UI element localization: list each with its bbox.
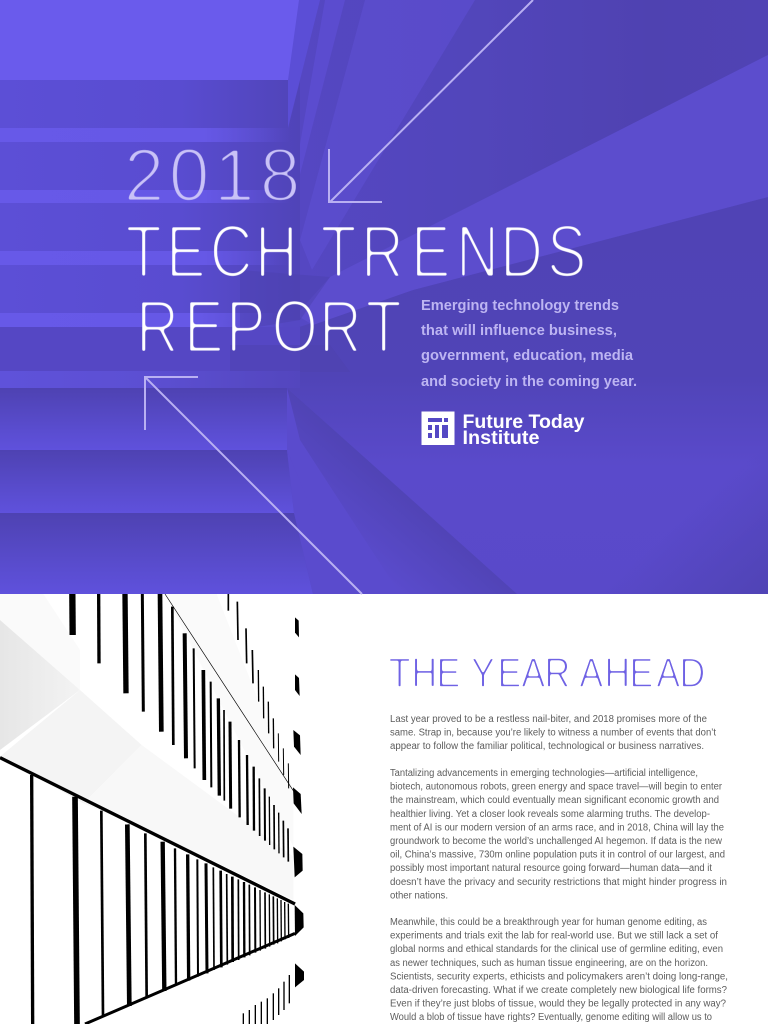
text block: cover subtitle: Emerging technology trends	[421, 297, 619, 314]
paragraph 2: healthier living. Yet a closer look reveals some alarming truths. The develop-	[390, 809, 710, 820]
photo: white building facade	[0, 594, 306, 1024]
paragraph 3: global norms and ethical standards for the clinical use of germline editing, even	[390, 944, 723, 955]
paragraph 3: data-driven forecasting. What if we create completely new biological life forms?	[390, 985, 728, 996]
paragraph 2: doesn’t have the privacy and security restrictions that might hinder progress in	[390, 877, 727, 888]
text block: cover subtitle	[421, 297, 637, 390]
paragraph 2: possibly most important natural resource going forward—human data—and it	[390, 863, 712, 874]
paragraph 3: Would a blob of tissue have rights? Eventually, genome editing will allow us to	[390, 1012, 713, 1023]
arrow: bottom diagonal arrow	[145, 377, 362, 594]
title: 2018 TECH TRENDS REPORT: 2018	[124, 133, 300, 217]
paragraph 3: Even if they’re just blobs of tissue, would they be legally protected in any way?	[390, 999, 727, 1010]
title: 2018 TECH TRENDS REPORT: REPORT	[136, 286, 402, 369]
paragraph 3: as newer techniques, such as human tissue engineering, are on the horizon.	[390, 958, 708, 969]
paragraph 1: same. Strap in, because you’re likely to witness a number of events that don’t	[390, 728, 716, 738]
paragraph 3: experiments and trials exit the lab for real-world use. But we still lack a set of	[390, 931, 718, 942]
paragraph 3	[390, 917, 728, 1023]
paragraph 2: ment of AI is our modern version of an arms race, and in 2018, China will lay the	[390, 822, 725, 833]
paragraph 1	[390, 714, 716, 752]
paragraph 2: groundwork to become the world’s unchallenged AI hegemon. If data is the new	[390, 836, 723, 847]
paragraph 2: the mainstream, which could eventually mean significant economic growth and	[390, 795, 719, 806]
arrow: top diagonal arrow	[329, 0, 533, 202]
title: 2018 TECH TRENDS REPORT: TECH TRENDS	[126, 211, 587, 294]
paragraph 2: biotech, autonomous robots, green energy and space travel—will begin to enter	[390, 782, 723, 793]
paragraph 1: Last year proved to be a restless nail-biter, and 2018 promises more of the	[390, 714, 708, 725]
panel: cover background	[0, 0, 768, 594]
text block: cover subtitle: and society in the coming year.	[421, 373, 637, 390]
logo wordmark	[462, 412, 585, 449]
paragraph 1: appear to follow the familiar political, technological or business narratives.	[390, 741, 704, 752]
paragraph 2	[390, 768, 727, 901]
text block: article body	[390, 714, 728, 1023]
paragraph 2: Tantalizing advancements in emerging technologies—artificial intelligence,	[390, 768, 698, 779]
paragraph 2: oil, China’s massive, 730m online population puts it in control of our largest, and	[390, 850, 725, 861]
paragraph 3: Meanwhile, this could be a breakthrough year for human genome editing, as	[390, 917, 707, 928]
title: 2018 TECH TRENDS REPORT	[124, 133, 587, 369]
logo wordmark: Future Today	[462, 412, 585, 433]
paragraph 2: other nations.	[390, 890, 448, 901]
logo: Future Today Institute	[422, 412, 585, 449]
logo wordmark: Institute	[462, 428, 540, 449]
paragraph 3: Scientists, security experts, ethicists and policymakers aren’t doing long-range,	[390, 971, 728, 982]
text block: cover subtitle: that will influence business,	[421, 322, 617, 339]
heading: THE YEAR AHEAD: THE YEAR AHEAD	[389, 650, 705, 697]
text block: cover subtitle: government, education, media	[421, 347, 634, 364]
icon: logo mark	[422, 412, 454, 445]
